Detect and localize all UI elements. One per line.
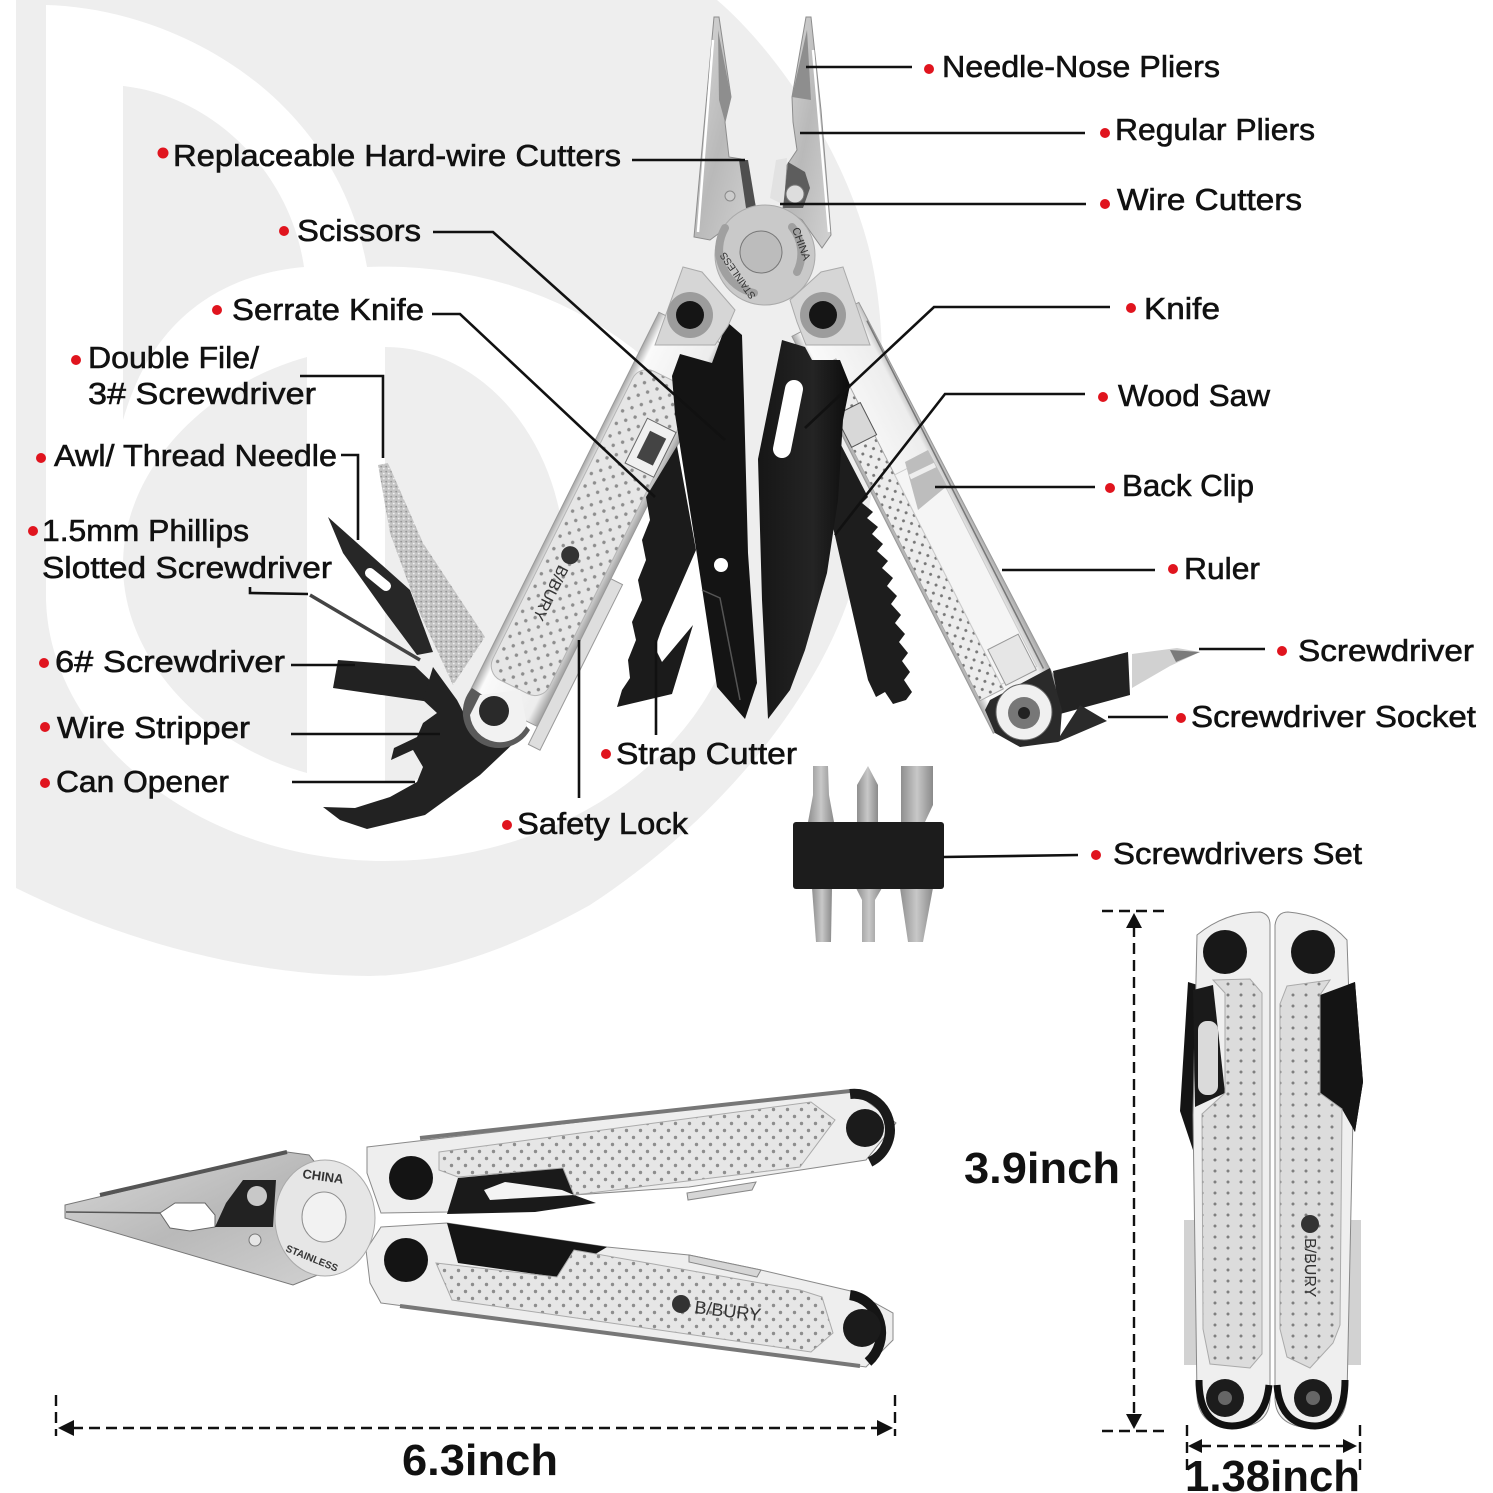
central pivot: CHINA <box>789 226 812 263</box>
dimension: length 6.3 inch <box>56 1395 895 1485</box>
right head and pivot <box>790 267 870 345</box>
screwdriver bit set <box>793 766 944 942</box>
left black insert <box>1180 982 1225 1150</box>
part labels: 3# Screwdriver <box>88 376 316 411</box>
tool: knife blade <box>758 340 850 719</box>
upper handle <box>367 1090 896 1214</box>
left bottom pivot <box>463 688 530 748</box>
tool: thin screwdriver <box>310 595 420 660</box>
part labels: Awl/ Thread Needle <box>54 438 337 473</box>
left head and pivot <box>655 267 735 345</box>
part labels: Wire Stripper <box>57 710 250 745</box>
red bullets <box>28 64 1287 860</box>
part labels: Back Clip <box>1122 468 1254 503</box>
background brand logo watermark <box>16 0 882 976</box>
multitool open, top view <box>310 17 1200 829</box>
part labels: Needle-Nose Pliers <box>942 49 1220 84</box>
part labels: Can Opener <box>56 764 229 799</box>
part labels: Regular Pliers <box>1115 112 1315 147</box>
part labels: 1.5mm Phillips <box>42 513 249 548</box>
left handle <box>460 312 739 750</box>
part labels: Strap Cutter <box>616 736 797 771</box>
tool: stripper, can opener and blade <box>323 667 517 829</box>
tool: awl <box>328 517 433 655</box>
pliers jaws <box>694 17 831 248</box>
tool: scissors <box>672 322 757 719</box>
closed multitool, side view <box>65 1090 896 1367</box>
lower handle <box>366 1223 893 1367</box>
closed multitool, front view <box>1180 912 1363 1428</box>
back clip <box>905 450 947 510</box>
part labels: Screwdriver <box>1298 633 1474 668</box>
tool: saw blade <box>833 443 912 704</box>
leader lines <box>250 67 1265 857</box>
pivot disc: STAINLESS <box>284 1244 340 1275</box>
right black insert <box>1320 982 1363 1132</box>
logo text: B/BURY <box>694 1297 762 1325</box>
right handle <box>792 300 1065 733</box>
logo text <box>1301 1215 1319 1298</box>
part labels: Double File/ <box>88 340 259 375</box>
right half <box>1275 912 1363 1428</box>
right bottom screwdriver bit <box>1053 648 1200 714</box>
dimension: width 1.38 inch <box>1185 1425 1360 1493</box>
part labels: Slotted Screwdriver <box>42 550 332 585</box>
part labels: Ruler <box>1184 551 1260 586</box>
pivot disc: CHINA <box>302 1166 345 1187</box>
part labels: Screwdriver Socket <box>1191 699 1476 734</box>
central pivot <box>715 205 815 305</box>
side clips <box>1184 1220 1361 1365</box>
left half <box>1193 912 1270 1428</box>
logo text: B/BURY <box>529 562 571 623</box>
part labels: Serrate Knife <box>232 292 424 327</box>
pliers jaws <box>65 1152 345 1285</box>
screwdriver socket and bottom pivot <box>985 668 1107 747</box>
tool: 6# screwdriver <box>333 660 440 702</box>
logo text: B/BURY <box>1301 1238 1318 1298</box>
part labels <box>42 49 1476 871</box>
dimension: length 6.3 inch: 6.3inch <box>402 1436 558 1485</box>
part labels: 6# Screwdriver <box>55 644 285 679</box>
part labels: Scissors <box>297 213 421 248</box>
dimension: height 3.9 inch <box>964 911 1168 1431</box>
part labels: Safety Lock <box>517 806 689 841</box>
part labels: Screwdrivers Set <box>1113 836 1362 871</box>
dimension: height 3.9 inch: 3.9inch <box>964 1144 1120 1193</box>
part labels: Knife <box>1144 291 1220 326</box>
central pivot: STAINLESS <box>718 250 758 301</box>
tool: serrated knife with strap cutter <box>617 446 696 707</box>
pivot disc <box>275 1160 375 1276</box>
part labels: Replaceable Hard-wire Cutters <box>173 138 621 173</box>
part labels: Wire Cutters <box>1117 182 1302 217</box>
logo text <box>529 543 582 624</box>
tool: file <box>378 463 485 685</box>
part labels: Wood Saw <box>1118 378 1271 413</box>
